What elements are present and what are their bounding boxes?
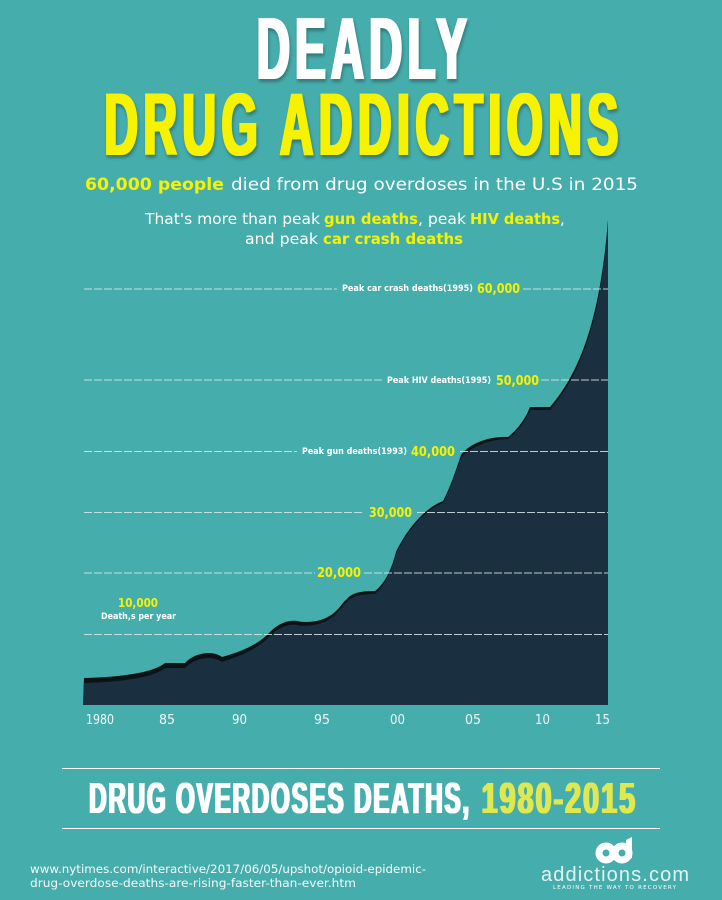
- title: DEADLY: [257, 0, 467, 98]
- comparison text: That's more than peak: [144, 210, 320, 228]
- title: [105, 0, 618, 175]
- logo: addictions.com: [541, 837, 689, 891]
- label: 10,000 deaths per year: Death,s per year: [101, 612, 177, 622]
- label: 10,000 deaths per year: 10,000: [118, 595, 158, 610]
- headline statistic: 60,000 people: [85, 175, 224, 195]
- x axis labels: 05: [465, 712, 481, 728]
- x axis labels: 10: [535, 712, 550, 728]
- comparison text: car crash deaths: [323, 230, 463, 248]
- label: 60,000 car crash peak: [342, 281, 520, 297]
- x axis labels: 15: [595, 712, 610, 728]
- x axis labels: 1980: [86, 712, 114, 728]
- x axis labels: [86, 712, 610, 728]
- comparison text: [144, 210, 565, 248]
- label: 40,000 gun peak: [302, 444, 455, 460]
- comparison text: and peak: [245, 230, 318, 248]
- comparison text: , peak: [418, 210, 466, 228]
- label: 50,000 HIV peak: Peak HIV deaths(1995): [387, 376, 491, 386]
- chart title: 1980-2015: [482, 773, 635, 822]
- headline statistic: died from drug overdoses in the U.S in 2015: [231, 175, 638, 195]
- label: 20,000: 20,000: [317, 565, 361, 581]
- chart title: [62, 768, 660, 829]
- x axis labels: 00: [390, 712, 405, 728]
- comparison text: gun deaths: [324, 210, 418, 228]
- logo: addictions.com: addictions.com: [541, 864, 689, 886]
- label: 10,000 deaths per year: [101, 595, 177, 622]
- chart title: DRUG OVERDOSES DEATHS,: [89, 773, 469, 823]
- x axis labels: 85: [159, 712, 175, 728]
- comparison text: ,: [560, 210, 565, 228]
- label: 30,000: 30,000: [369, 505, 412, 521]
- area chart: overdose deaths: [83, 220, 608, 705]
- source: drug-overdose-deaths-are-rising-faster-than-ever.htm: [30, 876, 356, 890]
- title: DRUG ADDICTIONS: [105, 76, 618, 175]
- headline statistic: [85, 175, 638, 195]
- label: 60,000 car crash peak: Peak car crash deaths(1995): [342, 284, 473, 294]
- label: 50,000 HIV peak: 50,000: [496, 373, 539, 389]
- x axis labels: 90: [232, 712, 247, 728]
- label: 50,000 HIV peak: [387, 373, 539, 389]
- label: 40,000 gun peak: 40,000: [411, 444, 455, 460]
- gridlines: [84, 289, 608, 634]
- source: [30, 862, 426, 890]
- source: www.nytimes.com/interactive/2017/06/05/upshot/opioid-epidemic-: [30, 862, 426, 876]
- comparison text: HIV deaths: [470, 210, 560, 228]
- label: 60,000 car crash peak: 60,000: [477, 281, 520, 297]
- logo: addictions.com: LEADING THE WAY TO RECOVERY: [553, 885, 677, 891]
- label: 40,000 gun peak: Peak gun deaths(1993): [302, 447, 407, 457]
- x axis labels: 95: [314, 712, 330, 728]
